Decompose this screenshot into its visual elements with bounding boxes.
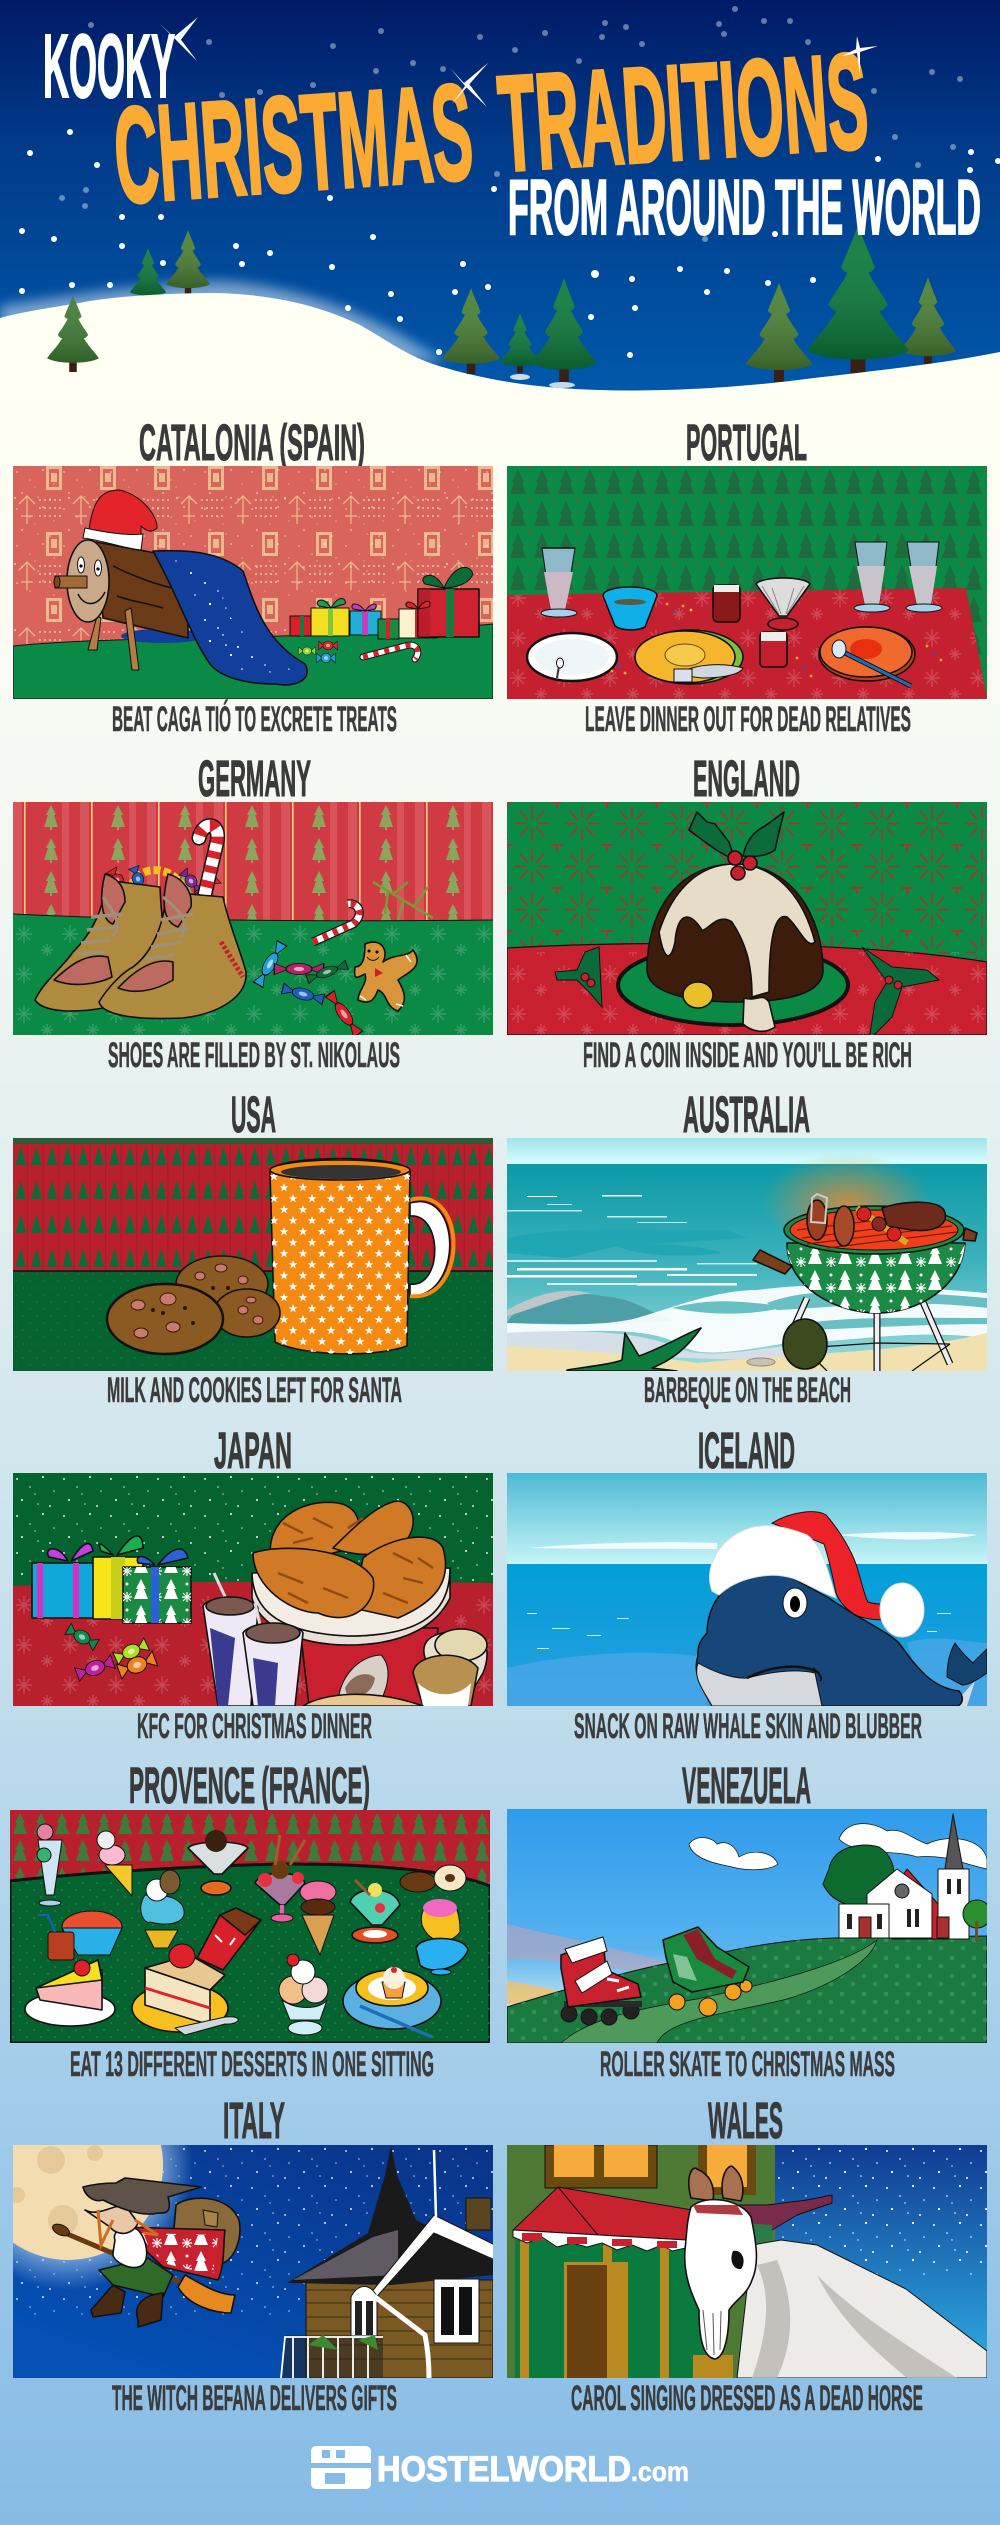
panel: Venezuela (507, 1809, 987, 2043)
orange plate (819, 627, 915, 686)
ribbons (737, 2195, 832, 2235)
text: SHOES ARE FILLED BY ST. NIKOLAUS (108, 1036, 400, 1075)
cola and snow bowl (38, 1911, 122, 1960)
sparkles on the title (160, 17, 878, 107)
text: BEAT CAGA TIÓ TO EXCRETE TREATS (112, 699, 397, 739)
sweets on floor (253, 904, 363, 1037)
holly on pudding (689, 812, 784, 880)
hill (507, 1936, 987, 2043)
trees on the hill (47, 278, 597, 388)
text: ENGLAND (693, 750, 800, 807)
red drink (713, 585, 740, 622)
chocolate bar (197, 1908, 261, 1970)
text: EAT 13 DIFFERENT DESSERTS IN ONE SITTING (70, 2045, 434, 2084)
text: AUSTRALIA (683, 1086, 810, 1143)
panel: Japan (13, 1473, 493, 1706)
donuts (400, 1865, 466, 1892)
waves and foam (507, 1294, 675, 1324)
ice cream cone (97, 1831, 132, 1896)
sea (507, 1164, 987, 1371)
mug (270, 1158, 454, 1354)
bucket (252, 1568, 450, 1706)
pudding (647, 864, 823, 1031)
floor (10, 1864, 490, 2043)
text: KOOKY (43, 17, 175, 117)
candy cane (199, 826, 218, 902)
whale (696, 1563, 987, 1706)
floor (13, 914, 493, 1035)
moon (0, 2040, 193, 2290)
text: PORTUGAL (686, 414, 807, 471)
panel: England (507, 802, 987, 1035)
witch (51, 2178, 240, 2327)
text: WALES (708, 2092, 783, 2149)
horse sheet (737, 2240, 987, 2378)
building wall (507, 2145, 775, 2378)
table (13, 1271, 493, 1371)
sweets in boots (106, 865, 221, 899)
text: GERMANY (198, 750, 311, 807)
starfish (567, 1328, 701, 1371)
shop front (515, 2240, 710, 2378)
awning (513, 2187, 692, 2251)
title: christmas traditions: CHRISTMAS (109, 55, 477, 232)
panel: Australia (507, 1138, 987, 1371)
side dishes (303, 1629, 487, 1706)
logo: Hostelworld (311, 2446, 689, 2489)
santa hat (709, 1512, 924, 1637)
header: night sky (0, 0, 1000, 400)
logo: Hostelworld: HOSTELWORLD (377, 2450, 631, 2489)
blue bowl (603, 587, 657, 630)
text: JAPAN (214, 1422, 292, 1479)
posts and door (520, 2240, 733, 2378)
pebble (747, 1358, 775, 1366)
panel: Catalonia (13, 466, 493, 699)
floor (13, 624, 493, 699)
gingerbread man (355, 942, 417, 1011)
horse skull (685, 2166, 756, 2359)
layer cake (132, 1944, 238, 2035)
text: ICELAND (698, 1422, 795, 1479)
panel: Portugal (507, 466, 987, 699)
side holly (555, 947, 939, 1040)
panel: Italy (13, 2145, 493, 2378)
pink cone (300, 1881, 336, 1955)
panel: Provence (10, 1810, 490, 2043)
table (507, 944, 987, 1035)
blue cream sundae (141, 1870, 184, 1948)
text: KFC FOR CHRISTMAS DINNER (137, 1707, 372, 1746)
panel: USA (13, 1138, 493, 1371)
text: VENEZUELA (682, 1757, 811, 1814)
snowy hill (0, 293, 1000, 400)
cookies (107, 1256, 280, 1354)
panel: Wales (507, 2145, 987, 2378)
path (561, 1940, 877, 2043)
drink cups (203, 1573, 303, 1706)
glasses (541, 542, 942, 617)
sprinkles (611, 603, 942, 677)
sundae glass (188, 1830, 248, 1895)
text: USA (231, 1086, 276, 1143)
trees behind the hill (130, 225, 956, 382)
fried chicken (253, 1501, 446, 1618)
ice cream cup (279, 1954, 328, 2035)
table (507, 588, 987, 699)
house (281, 2146, 495, 2378)
blanket (153, 551, 307, 685)
gifts (32, 1536, 191, 1623)
text: THE WITCH BEFANA DELIVERS GIFTS (112, 2379, 397, 2418)
sweets (65, 1623, 158, 1681)
panel: Iceland (507, 1473, 987, 1706)
white plate (527, 633, 617, 681)
blue plate (343, 1967, 441, 2037)
panel: Germany (13, 802, 493, 1035)
pine branch (373, 882, 433, 920)
tall sundae (37, 1824, 62, 1906)
yellow plate (635, 630, 743, 684)
glass dessert dish (756, 578, 810, 616)
falling snow (19, 6, 1000, 358)
grill (753, 1194, 977, 1371)
gifts (290, 567, 479, 639)
plate (618, 945, 848, 1025)
parfait (255, 1835, 305, 1922)
clouds (689, 1824, 987, 1870)
sand (507, 1333, 987, 1371)
text: CATALONIA (SPAIN) (139, 414, 365, 471)
logo: Hostelworld: .com (631, 2456, 689, 2487)
sea (507, 1564, 987, 1706)
rainbow trail (507, 1924, 687, 1981)
text: ITALY (223, 2092, 285, 2149)
red glass (760, 632, 787, 667)
green roller skate (663, 1927, 752, 2016)
log: Caga Tio (54, 490, 188, 670)
table (13, 1582, 493, 1706)
glow behind grill (762, 1153, 932, 1253)
tree (823, 1845, 894, 1907)
wispy clouds (529, 1532, 977, 1549)
boots (35, 874, 246, 1019)
windows (545, 2145, 756, 2195)
coin (683, 982, 713, 1008)
text: PROVENCE (FRANCE) (129, 1757, 370, 1814)
blanket under log (121, 629, 205, 643)
sundae with fruit (350, 1880, 400, 1943)
red roller blade (561, 1937, 642, 2025)
church (839, 1814, 991, 1941)
mango sundae (416, 1899, 468, 1975)
text: MILK AND COOKIES LEFT FOR SANTA (107, 1371, 402, 1410)
cake slice on plate (25, 1960, 115, 2026)
candy cane and sweets (298, 641, 418, 663)
